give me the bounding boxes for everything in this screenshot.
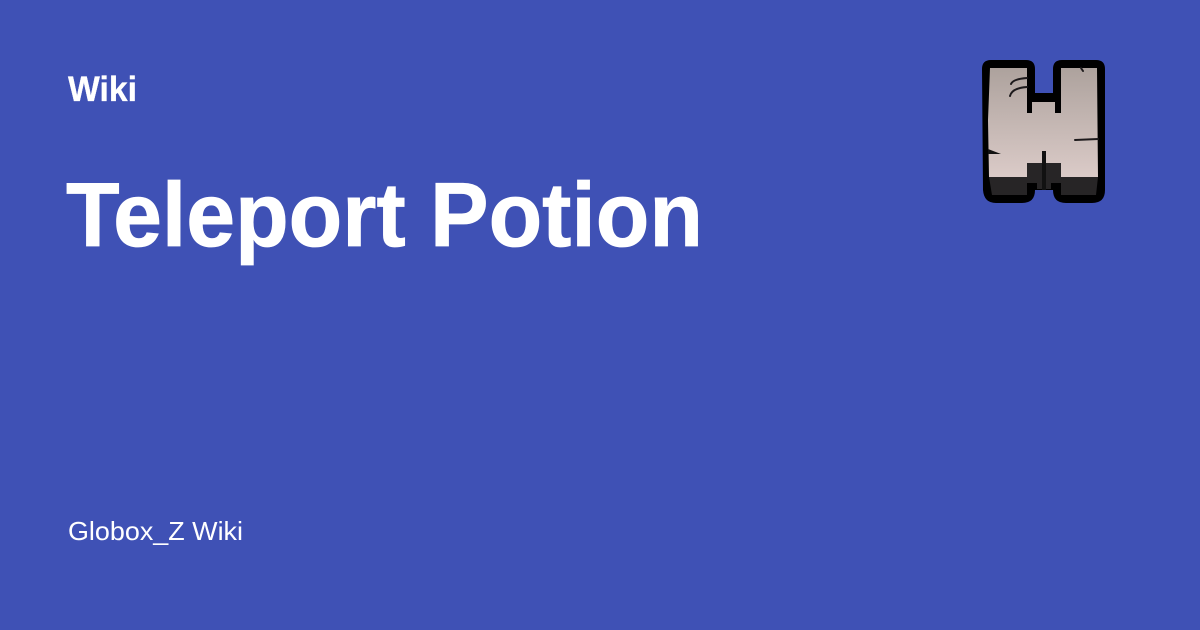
section label: Wiki: Wiki	[68, 70, 137, 109]
footer: site name: Globox_Z Wiki	[68, 516, 243, 546]
stone face	[988, 68, 1098, 177]
cracks on stone	[1010, 68, 1098, 140]
icon: stone H-shaped block	[982, 60, 1105, 203]
shaded base centre	[1027, 163, 1061, 189]
centre crack	[1042, 151, 1046, 190]
shaded base left	[989, 177, 1027, 195]
shaded base right	[1061, 177, 1098, 195]
title: Teleport Potion: Teleport Potion	[66, 165, 703, 266]
icon outline	[982, 60, 1105, 203]
chip on left edge	[988, 149, 1001, 154]
